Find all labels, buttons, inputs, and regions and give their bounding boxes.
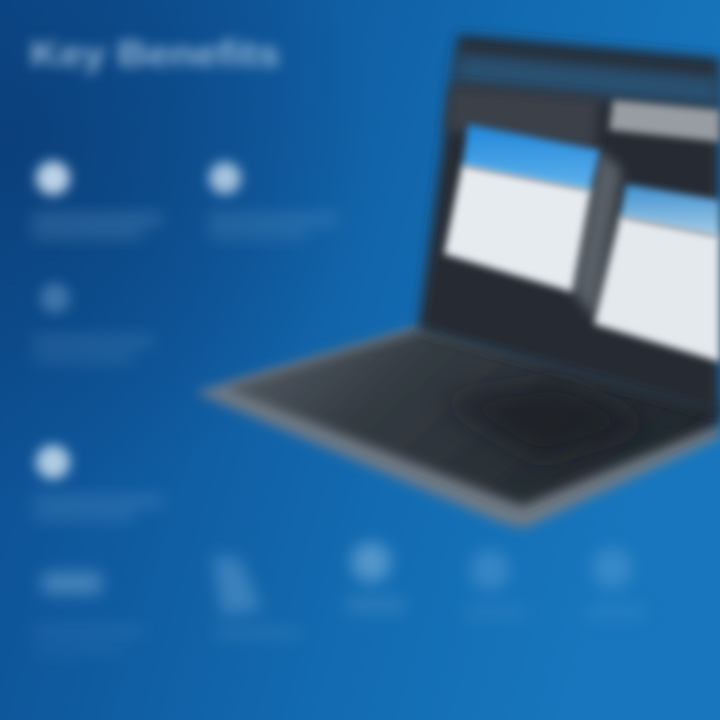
window body: right (594, 216, 720, 362)
window separator strip (572, 150, 622, 320)
window header: right (620, 184, 720, 238)
bottom item 4 (465, 550, 525, 618)
feature block: top middle (208, 162, 338, 238)
laptop keyboard deck (225, 330, 720, 506)
grey bar: right (609, 100, 720, 142)
laptop base edge (195, 326, 720, 528)
bottom item 2 (212, 555, 300, 638)
window: right (594, 184, 720, 362)
laptop screen (418, 35, 720, 415)
feature block: middle left (34, 283, 154, 362)
text: top middle (208, 214, 338, 238)
window header: left (462, 124, 600, 192)
feature block: top left (32, 161, 162, 238)
trackpad (440, 380, 650, 460)
feature block: lower left (34, 445, 164, 520)
icon: top middle (209, 162, 241, 194)
icon: lower left (36, 445, 70, 479)
window: left (444, 124, 600, 292)
screen dark panel band (445, 85, 600, 150)
screen top band (452, 52, 720, 108)
text: lower left (34, 496, 164, 520)
bottom item 3 (345, 542, 405, 612)
text: middle left (34, 336, 154, 362)
icon: top left (36, 161, 70, 195)
window body: left (444, 165, 591, 292)
title: Key Benefits (30, 33, 280, 74)
bottom item 5 (585, 548, 645, 618)
text: top left (32, 214, 162, 238)
bottom icon row (34, 542, 645, 654)
laptop (195, 35, 720, 528)
icon: middle left (40, 283, 70, 313)
bottom item 1 (34, 572, 144, 654)
